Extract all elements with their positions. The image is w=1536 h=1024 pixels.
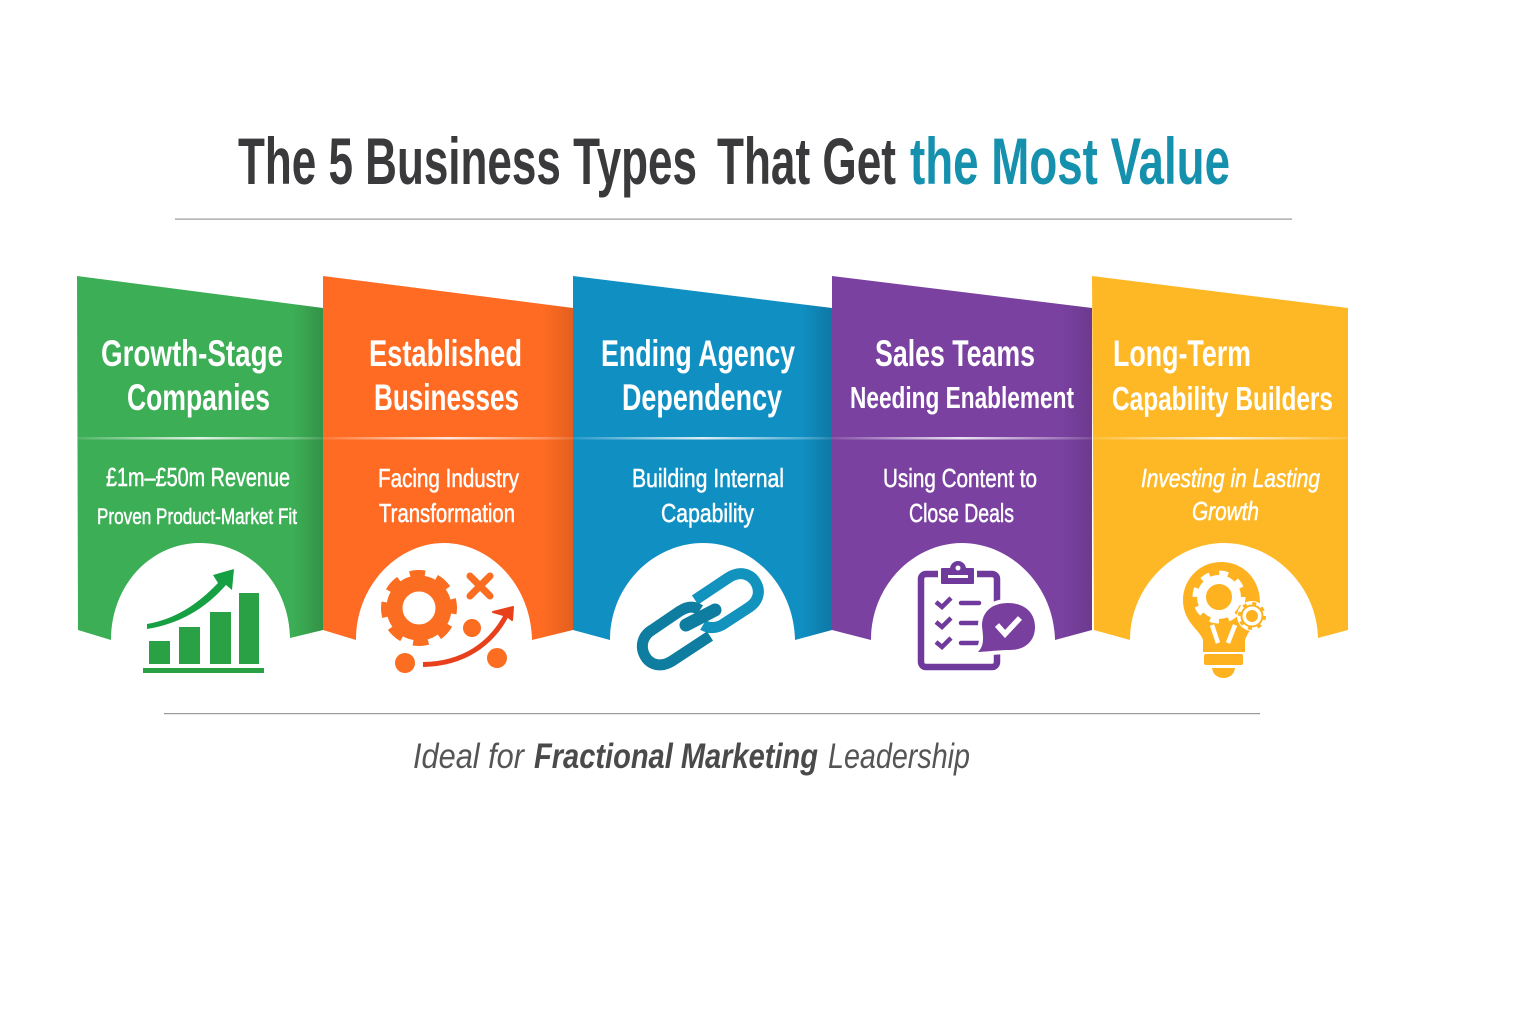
text: investing in lasting growth: Investing in Lasting (1141, 463, 1320, 493)
panel shape: blue banner (573, 276, 832, 640)
text: investing in lasting growth: Growth (1192, 496, 1259, 526)
footer tagline: Ideal for (413, 737, 525, 776)
title (238, 124, 1230, 198)
heading: ending agency dependency: Ending Agency (601, 333, 795, 374)
title: That Get (717, 124, 896, 198)
heading: sales teams needing enablement: Needing Enablement (850, 380, 1074, 415)
heading: established businesses: Established (369, 333, 522, 374)
footer tagline: Leadership (828, 737, 970, 776)
panel shape: yellow banner (1092, 276, 1348, 640)
heading: long-term capability builders: Long-Term (1113, 333, 1251, 374)
panel: long-term capability builders (1092, 276, 1348, 678)
heading: growth-stage companies (101, 333, 283, 418)
heading: sales teams needing enablement: Sales Teams (875, 333, 1035, 374)
panel: growth-stage companies (77, 276, 323, 673)
text: facing industry transformation: Transformation (379, 498, 515, 528)
text: revenue and fit: Proven Product-Market Fit (97, 504, 298, 529)
heading: established businesses: Businesses (374, 377, 519, 418)
text: building internal capability: Capability (661, 498, 754, 528)
heading: ending agency dependency (601, 333, 795, 418)
icon: light bulb with gears (1183, 562, 1267, 678)
panel: ending agency dependency (573, 276, 832, 665)
text: building internal capability: Building Internal (632, 463, 784, 493)
icon: growth bar chart (143, 569, 264, 673)
text: using content to close deals: Close Deals (909, 498, 1014, 528)
text: using content to close deals: Using Content to (883, 463, 1037, 493)
heading: ending agency dependency: Dependency (622, 377, 782, 418)
text: facing industry transformation (378, 463, 519, 528)
icon: chain link (642, 574, 758, 665)
heading: growth-stage companies: Companies (127, 377, 270, 418)
footer tagline: Fractional Marketing (534, 737, 818, 776)
text: investing in lasting growth (1141, 463, 1320, 526)
footer tagline (413, 737, 970, 776)
panel: sales teams needing enablement (832, 276, 1092, 667)
heading: established businesses (369, 333, 522, 418)
heading: sales teams needing enablement (850, 333, 1074, 415)
text: using content to close deals (883, 463, 1037, 528)
text: revenue and fit: £1m–£50m Revenue (106, 462, 290, 492)
heading: long-term capability builders: Capability Builders (1112, 380, 1333, 417)
heading: long-term capability builders (1112, 333, 1333, 417)
heading: growth-stage companies: Growth-Stage (101, 333, 283, 374)
text: revenue and fit (97, 462, 298, 529)
title: The 5 Business Types (238, 124, 697, 198)
panel shape: orange banner (323, 276, 573, 640)
panel shape: purple banner (832, 276, 1092, 640)
panel: established businesses (323, 276, 573, 673)
icon: gear and strategy play (383, 572, 513, 673)
title: the Most Value (910, 124, 1230, 198)
text: facing industry transformation: Facing Industry (378, 463, 519, 493)
panel shape: green banner (77, 276, 323, 640)
icon: clipboard with checklist and chat bubble (921, 562, 1035, 667)
text: building internal capability (632, 463, 784, 528)
